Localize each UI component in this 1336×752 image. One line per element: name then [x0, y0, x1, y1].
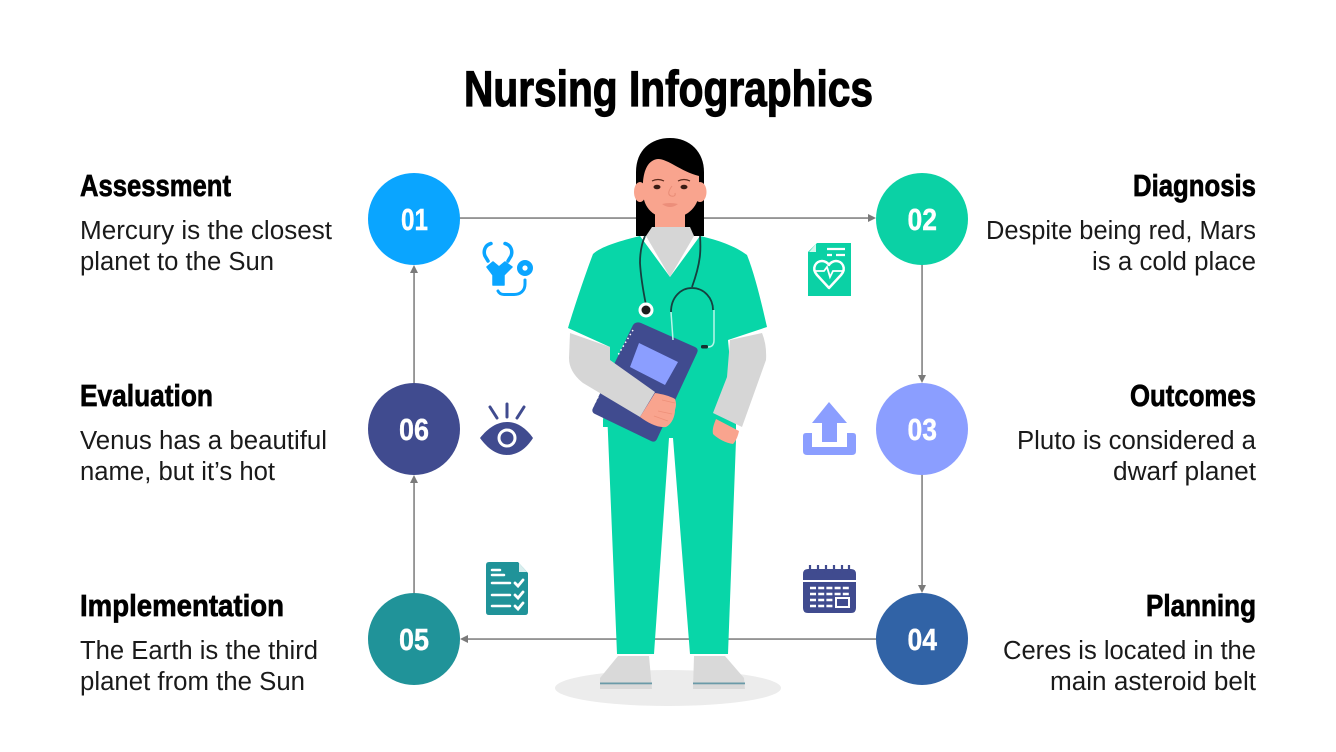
trousers — [607, 410, 736, 654]
icon: upload — [803, 402, 856, 455]
arrow: step 05 to step 06 — [410, 475, 418, 595]
number badge 03 — [876, 383, 968, 475]
arrow: step 06 to step 01 — [410, 265, 418, 385]
text block: diagnosis: is a cold place — [1092, 248, 1256, 276]
panel: diagnosis — [876, 169, 1256, 276]
number badge 05: 05 — [399, 622, 429, 657]
ears — [634, 182, 706, 202]
book — [592, 322, 698, 442]
text block: evaluation: Venus has a beautiful — [80, 427, 327, 455]
number badge 02 — [876, 173, 968, 265]
collar — [646, 227, 694, 277]
number badge 03: 03 — [908, 412, 937, 447]
number badge 06: 06 — [399, 412, 429, 447]
heading: diagnosis: Diagnosis — [1133, 169, 1256, 203]
facial features — [652, 180, 690, 207]
heading: implementation: Implementation — [80, 589, 284, 623]
heading: evaluation: Evaluation — [80, 379, 213, 413]
left arm — [569, 333, 655, 417]
icon: calendar — [803, 565, 856, 613]
text block: planning: main asteroid belt — [1050, 668, 1256, 696]
number badge 01 — [368, 173, 460, 265]
panel: planning — [876, 589, 1256, 696]
shoes — [600, 656, 745, 689]
scrub top — [568, 236, 767, 427]
right hand — [713, 419, 739, 444]
icon: stethoscope — [484, 244, 530, 294]
text block: evaluation — [80, 427, 327, 486]
right arm — [713, 333, 766, 427]
face — [643, 159, 699, 218]
heading: assessment: Assessment — [80, 169, 231, 203]
stethoscope — [638, 236, 714, 348]
text block: outcomes — [1017, 427, 1257, 486]
panel: evaluation — [80, 379, 460, 486]
ground shadow — [555, 670, 781, 706]
icon: eye — [480, 404, 533, 455]
left hand — [640, 393, 676, 427]
text block: implementation: planet from the Sun — [80, 668, 305, 696]
text block: assessment: planet to the Sun — [80, 248, 274, 276]
text block: diagnosis: Despite being red, Mars — [986, 217, 1256, 245]
nurse illustration — [555, 138, 781, 706]
number badge 04 — [876, 593, 968, 685]
text block: diagnosis — [986, 217, 1256, 276]
title: Nursing Infographics — [464, 61, 873, 117]
text block: evaluation: name, but it’s hot — [80, 458, 275, 486]
number badge 01: 01 — [401, 202, 428, 237]
text block: planning — [1003, 637, 1256, 696]
text block: implementation: The Earth is the third — [80, 637, 318, 665]
text block: assessment: Mercury is the closest — [80, 217, 332, 245]
heading: planning: Planning — [1146, 589, 1256, 623]
neck — [655, 205, 685, 235]
text block: outcomes: dwarf planet — [1113, 458, 1256, 486]
number badge 06 — [368, 383, 460, 475]
number badge 05 — [368, 593, 460, 685]
hair — [636, 138, 704, 236]
arrow: step 04 to step 05 — [460, 635, 878, 643]
heading: outcomes: Outcomes — [1130, 379, 1256, 413]
arrow: step 03 to step 04 — [918, 473, 926, 593]
text block: planning: Ceres is located in the — [1003, 637, 1256, 665]
icon: checklist document — [486, 562, 528, 615]
text block: implementation — [80, 637, 318, 696]
text block: assessment — [80, 217, 332, 276]
panel: assessment — [80, 169, 460, 276]
panel: implementation — [80, 589, 460, 696]
text block: outcomes: Pluto is considered a — [1017, 427, 1257, 455]
panel: outcomes — [876, 379, 1257, 486]
number badge 02: 02 — [908, 202, 937, 237]
arrow: step 01 to step 02 — [458, 214, 876, 222]
arrow: step 02 to step 03 — [918, 263, 926, 383]
number badge 04: 04 — [908, 622, 938, 657]
icon: heart report — [808, 243, 851, 296]
